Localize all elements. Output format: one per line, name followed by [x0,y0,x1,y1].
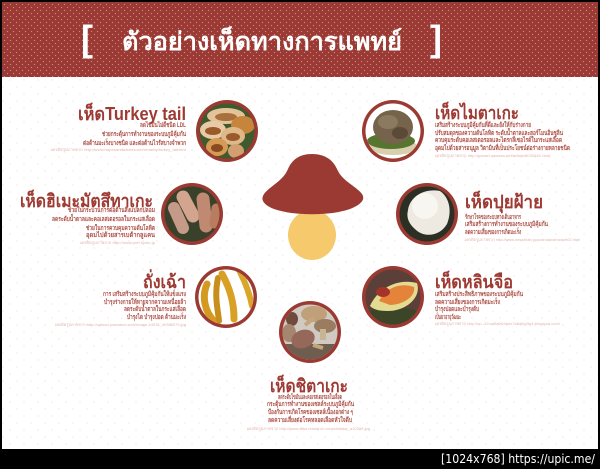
description [435,119,570,153]
photo [362,100,424,162]
description: ลดระดับไขมันและคอเรสเตอรอลในเลือด [278,392,342,401]
description: กระตุ้นการทำงานของเซลล์ระบบภูมิคุ้มกัน [267,399,354,409]
description [103,289,186,321]
description: เสริมสร้างระบบภูมิคุ้มกันที่ดีและยังให้กับร่างกาย [435,119,531,130]
panel: Himematsutake [20,183,223,246]
description: เสริมสร้างการทำงานของระบบภูมิคุ้มกัน [465,219,548,229]
description [267,392,354,424]
description: ลดระดับน้ำตาลและคอเลสเตอรอลในกระแสเลือด [52,213,155,223]
photo [196,100,258,162]
credit: เครดิตรูปภาพจาก http://xn--42cai5a6lv4bex7a8a9g2tg4.blogspot.com/ [435,321,561,327]
credit: เครดิตรูปภาพจาก http://www.ditta-research.com/shiitake_a10399.jpg [247,426,370,432]
photo [161,183,223,245]
description [83,120,186,147]
heading: เห็ดTurkey tail [78,102,186,124]
photo [396,183,458,245]
title right bracket: ] [430,18,442,59]
description: ลดระดับน้ำตาลในกระแสเลือด [124,303,186,313]
heading: เห็ดฮิเมะมัตสึทาเกะ [20,189,153,211]
title banner [2,2,598,77]
description: เสริมสร้างประสิทธิภาพของระบบภูมิคุ้มกัน [435,289,523,299]
description: ควบคุมระดับคอเลสเตอรอลและไตรกลีเซอไรด์ในกระแสเลือด [435,135,562,144]
description: ลดความเสี่ยงของการเกิดมะเร็ง [465,226,521,236]
heading: เห็ดชิตาเกะ [270,374,348,396]
description: บำรุงร่างกายให้หายจากความเหนื่อยล้า [104,296,186,306]
description: ลดความเสี่ยงต่อโรคหลอดเลือดหัวใจตีบ [268,414,352,424]
description: รักษาโรคของระบบทางเดินอาหาร [465,212,521,221]
panel: Maitake [362,100,570,162]
heading: เห็ดหลินจือ [435,270,513,292]
title: ตัวอย่างเห็ดทางการแพทย์ [122,26,402,56]
description [52,204,155,240]
panel: Reishi [362,266,561,328]
description: ช่วยกระตุ้นการทำงานของระบบภูมิคุ้มกัน [102,129,186,139]
panel: Cordyceps [55,266,257,328]
description: การ เสริมสร้างระบบภูมิคุ้มกันให้แข็งแรง [103,289,186,299]
title left bracket: [ [81,18,93,59]
credit: เครดิตรูปภาพจาก http://www.pref.kyoto.jp [80,240,156,246]
description: ต่อต้านมะเร็งบางชนิด และต่อต้านไวรัสบางจำพวก [83,138,186,147]
description [435,289,523,321]
description: อุดมไปด้วยสารเบต้ากลูแคน [86,230,155,240]
heading: ถั่งเฉ้า [143,269,186,292]
central mushroom icon [262,154,363,260]
description: ลดความเสี่ยงของการเกิดมะเร็ง [435,296,500,306]
description: ช่วยในกระบวนการต่อต้านสิ่งแปลกปลอม [68,204,155,214]
description: ช่วยในการควบคุมความดันโลหิต [86,223,155,232]
description [465,212,548,236]
description: บำรุงไต บำรุงปอด ต้านมะเร็ง [127,312,186,321]
photo [279,301,341,363]
photo [362,266,424,328]
description: ป้องกันการเกิดโรคของเซลล์เนื้องอกต่าง ๆ [268,406,353,416]
panel: Turkey tail [51,100,258,162]
credit: เครดิตรูปภาพจาก http://upload.pramatch.com/image-44576_40385979.jpg [55,322,186,328]
heading: เห็ดไมตาเกะ [435,101,519,123]
panel: Shiitake [247,301,370,432]
description: ลดไขมันไม่ดีชนิด LDL [140,120,186,129]
credit: เครดิตรูปภาพจาก http://panart.sawasa.net/article/8049461.html [435,153,550,159]
photo [195,266,257,328]
credit: เครดิตรูปภาพจาก http://www.hopesandwishes.net/remedy/turkey_tail.htm [51,147,187,153]
panel: Lion's mane [396,183,580,245]
description: บำรุงปอดและบำรุงตับ [435,305,479,313]
credit: เครดิตรูปภาพจาก http://www.newsthaiv.yuyuanaturalmarket02.html [465,237,580,243]
heading: เห็ดปุยฝ้าย [465,190,543,214]
description: เป็นยาอายุวัฒนะ [435,312,461,321]
